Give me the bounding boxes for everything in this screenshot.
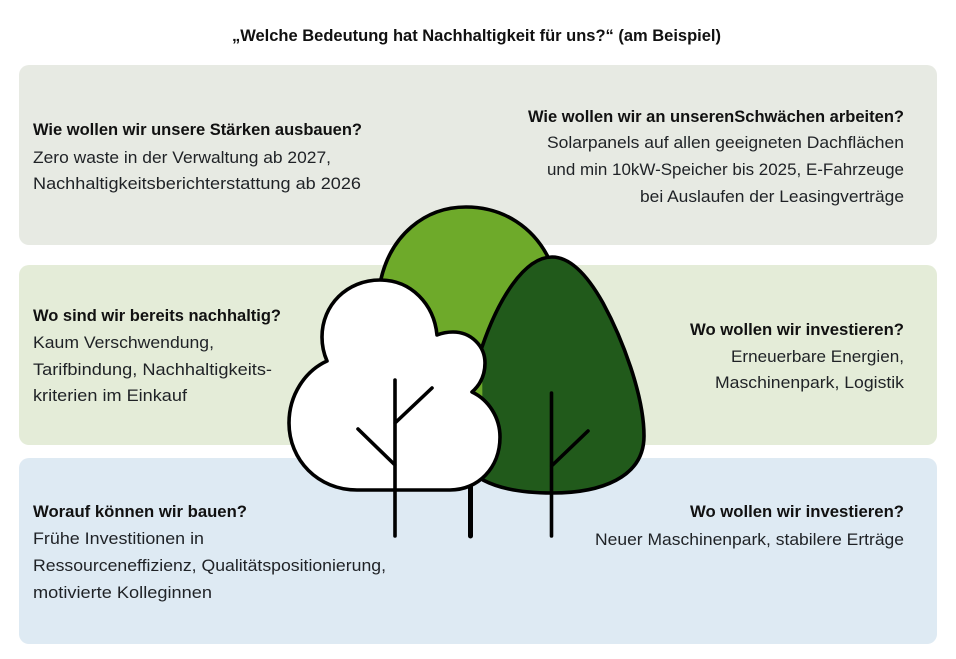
text block: strengths: Wie wollen wir unsere Stärken ausbauen? [33, 120, 362, 139]
icon: light green tree [381, 207, 549, 536]
text block: investments bottom: Wo wollen wir investieren? [690, 502, 904, 521]
icon: white tree [289, 280, 500, 536]
text block: investments middle [690, 320, 905, 392]
text block: foundations: Worauf können wir bauen? [33, 502, 247, 521]
text block: foundations: Frühe Investitionen in [33, 529, 204, 548]
icon: dark green tree [482, 257, 644, 536]
text block: foundations [33, 502, 386, 602]
text block: already sustainable: Wo sind wir bereits nachhaltig? [33, 306, 281, 325]
text block: already sustainable: Kaum Verschwendung, [33, 333, 214, 352]
text block: strengths: Nachhaltigkeitsberichterstattung ab 2026 [33, 174, 361, 193]
text block: investments bottom: Neuer Maschinenpark, stabilere Erträge [595, 530, 904, 549]
icon: group of three trees [289, 207, 644, 536]
panel: bottom [19, 458, 937, 644]
panel: top [19, 65, 937, 245]
text block: weaknesses: Wie wollen wir an unserenSchwächen arbeiten? [528, 107, 904, 126]
text block: foundations: motivierte Kolleginnen [33, 583, 212, 602]
text block: investments middle: Wo wollen wir investieren? [690, 320, 904, 339]
text block: investments bottom [595, 502, 904, 549]
text block: weaknesses: Solarpanels auf allen geeigneten Dachflächen [547, 133, 904, 152]
text block: already sustainable [33, 306, 281, 405]
text block: strengths: Zero waste in der Verwaltung ab 2027, [33, 148, 331, 167]
panel: middle [19, 265, 937, 445]
title: „Welche Bedeutung hat Nachhaltigkeit für uns?“ (am Beispiel) [232, 26, 721, 45]
text block: weaknesses: bei Auslaufen der Leasingverträge [640, 187, 904, 206]
text block: strengths [33, 120, 362, 193]
text block: already sustainable: Tarifbindung, Nachhaltigkeits- [33, 360, 272, 379]
text block: investments middle: Erneuerbare Energien, [731, 347, 904, 366]
text block: investments middle: Maschinenpark, Logistik [715, 373, 905, 392]
text block: weaknesses: und min 10kW-Speicher bis 2025, E-Fahrzeuge [547, 160, 904, 179]
text block: already sustainable: kriterien im Einkauf [33, 386, 187, 405]
text block: weaknesses [528, 107, 904, 206]
text block: foundations: Ressourceneffizienz, Qualitätspositionierung, [33, 556, 386, 575]
